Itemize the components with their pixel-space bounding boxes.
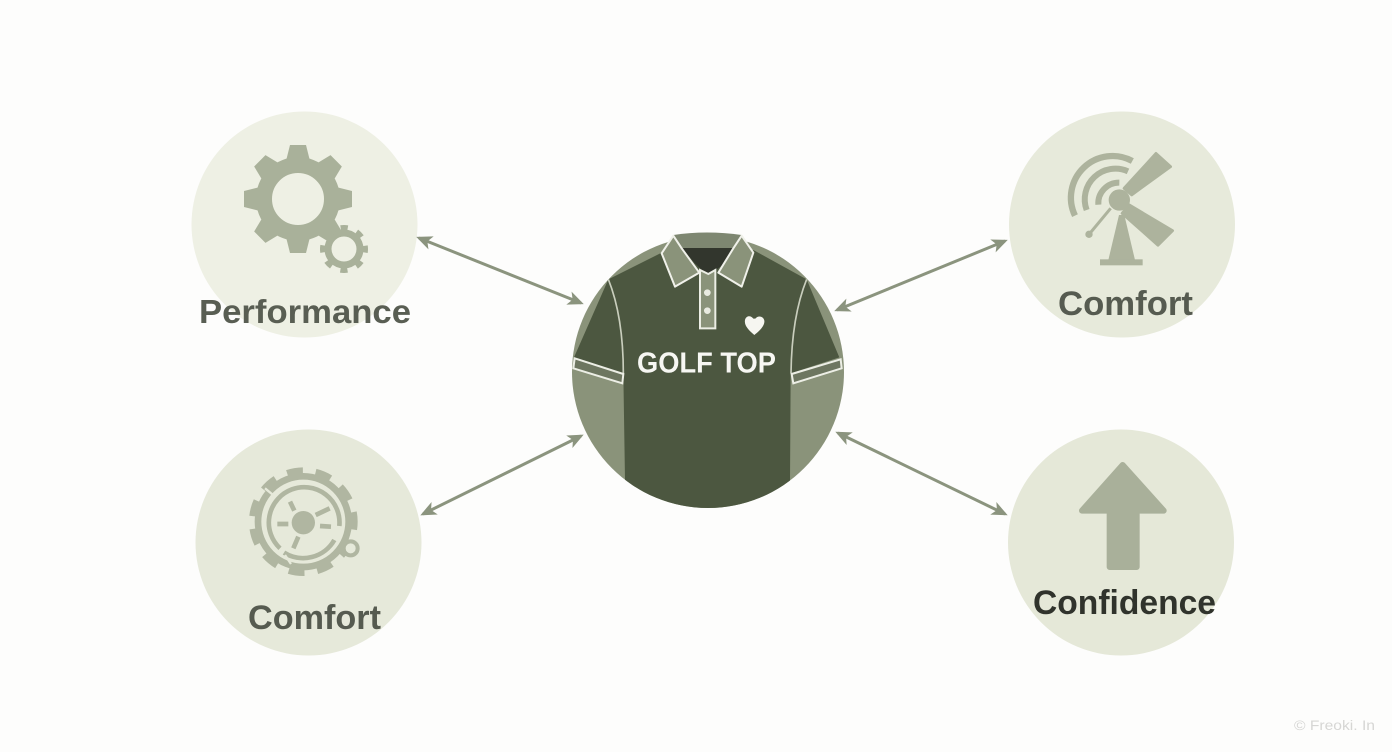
left cuff	[573, 358, 623, 383]
circle: Confidence background	[1008, 430, 1234, 656]
arrow: Comfort (top right) to golf top	[837, 241, 1005, 310]
label: Confidence: Confidence	[1033, 584, 1216, 622]
panel: Comfort (bottom left)	[196, 430, 422, 656]
shirt torso	[574, 250, 839, 520]
back collar	[673, 232, 742, 248]
buttons	[704, 289, 711, 296]
icon: fan with signal arcs	[1071, 153, 1173, 265]
icon: gears	[244, 145, 365, 270]
circle: Comfort background	[1009, 112, 1235, 338]
icon: polo shirt	[572, 232, 844, 520]
right cuff	[792, 359, 842, 383]
icon: up arrow	[1082, 465, 1164, 567]
right collar flap	[718, 236, 753, 287]
circle: Comfort background	[196, 430, 422, 656]
panel: Performance (top left)	[192, 112, 418, 338]
placket	[700, 270, 715, 328]
label: GOLF TOP: GOLF TOP	[637, 348, 776, 380]
label: Comfort: Comfort	[1058, 285, 1193, 323]
watermark: © Freoki. In	[1294, 717, 1375, 733]
left collar flap	[662, 236, 699, 287]
arrow: Confidence to golf top	[838, 433, 1005, 514]
label: Performance: Performance	[199, 293, 411, 330]
label: Comfort: Comfort	[248, 599, 381, 637]
circle: Performance background	[192, 112, 418, 338]
neck opening	[682, 248, 733, 276]
heart logo	[745, 316, 764, 335]
sleeve seams	[608, 279, 807, 373]
arrow: Comfort (bottom left) to golf top	[423, 436, 581, 514]
panel: Confidence (bottom right)	[1008, 430, 1234, 656]
panel: golf top centre	[572, 232, 844, 520]
icon: gear dial	[252, 471, 358, 573]
arrow: Performance to golf top	[419, 238, 581, 303]
panel: Comfort (top right)	[1009, 112, 1235, 338]
